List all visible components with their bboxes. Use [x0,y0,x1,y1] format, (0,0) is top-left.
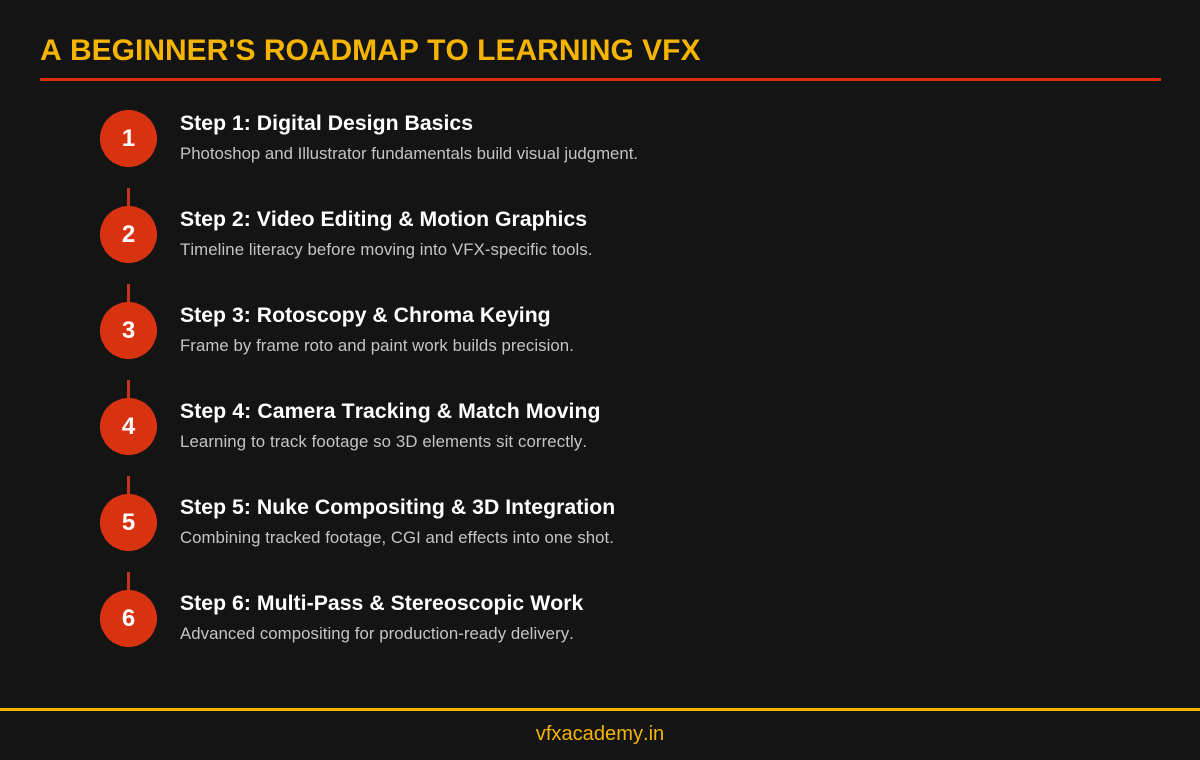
connector 3 to 4 [127,380,130,398]
step 5 heading: Step 5: Nuke Compositing & 3D Integration [180,496,615,519]
step 1 heading: Step 1: Digital Design Basics [180,112,473,135]
step 2 number circle: 2 [122,221,135,248]
step 4 number circle [100,398,157,455]
step 3 description: Frame by frame roto and paint work builds precision. [180,336,574,355]
step 5 [100,494,615,551]
title: A BEGINNER'S ROADMAP TO LEARNING VFX [40,34,700,67]
connector 5 to 6 [127,572,130,590]
step 6 heading: Step 6: Multi-Pass & Stereoscopic Work [180,592,583,615]
step 3 [100,302,574,359]
footer rule [0,708,1200,711]
step 2 number circle [100,206,157,263]
step 4 description: Learning to track footage so 3D elements sit correctly. [180,432,587,451]
connector 1 to 2 [127,188,130,206]
step 4 [100,398,601,455]
step 6 description: Advanced compositing for production-ready delivery. [180,624,574,643]
step 2 [100,206,593,263]
step 3 heading: Step 3: Rotoscopy & Chroma Keying [180,304,551,327]
step 6 number circle [100,590,157,647]
step 4 number circle: 4 [122,413,135,440]
step 3 number circle [100,302,157,359]
step 2 heading: Step 2: Video Editing & Motion Graphics [180,208,587,231]
step 1 number circle: 1 [122,125,135,152]
step 5 description: Combining tracked footage, CGI and effects into one shot. [180,528,614,547]
connector 4 to 5 [127,476,130,494]
step 1 number circle [100,110,157,167]
step 3 number circle: 3 [122,317,135,344]
step 6 number circle: 6 [122,605,135,632]
step 2 description: Timeline literacy before moving into VFX-specific tools. [180,240,593,259]
connector 2 to 3 [127,284,130,302]
title underline [40,78,1161,81]
footer website: vfxacademy.in [536,723,664,745]
step 4 heading: Step 4: Camera Tracking & Match Moving [180,400,601,423]
step 1 description: Photoshop and Illustrator fundamentals build visual judgment. [180,144,638,163]
step 5 number circle [100,494,157,551]
step 1 [100,110,638,167]
step 6 [100,590,584,647]
step 5 number circle: 5 [122,509,135,536]
